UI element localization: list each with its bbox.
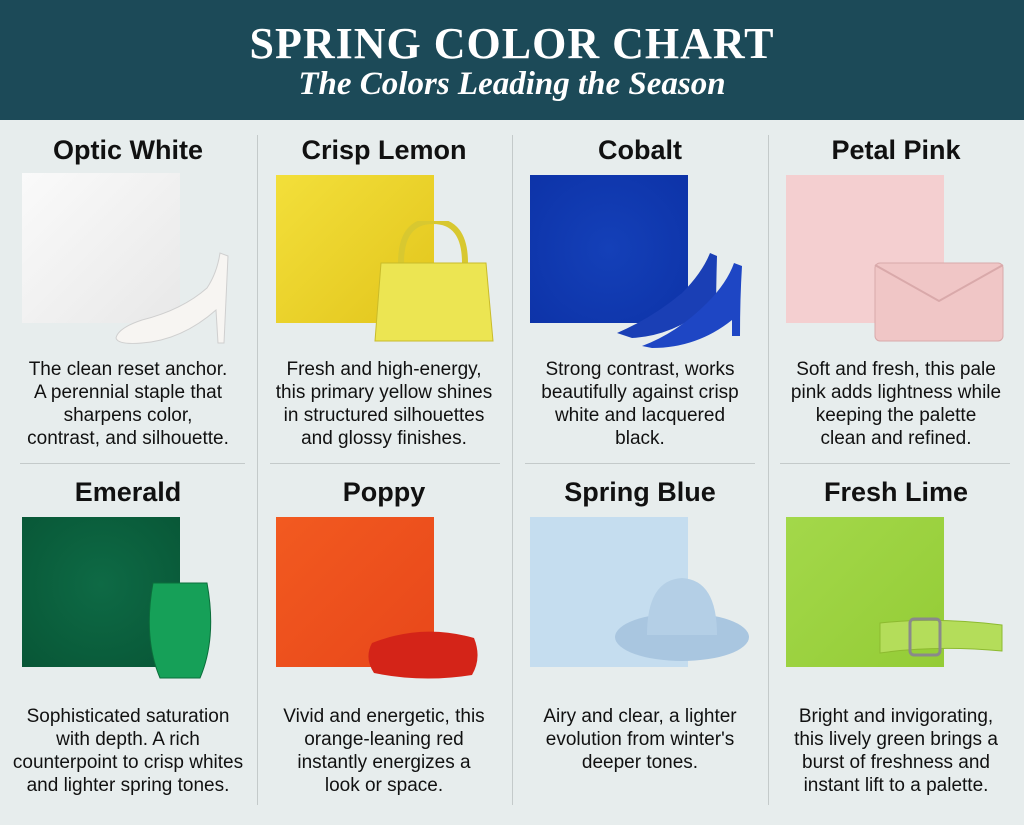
- panel: poppy: Poppy: [343, 477, 425, 507]
- panel: crisp lemon: this primary yellow shines: [276, 382, 492, 403]
- panel: cobalt: beautifully against crisp: [541, 382, 739, 403]
- panel: crisp lemon: Crisp Lemon: [301, 135, 467, 165]
- panel: petal pink: keeping the palette: [816, 405, 976, 426]
- icon: clutch: [874, 262, 1004, 342]
- panel: fresh lime: Bright and invigorating,: [799, 706, 993, 727]
- panel: optic white: A perennial staple that: [34, 382, 222, 403]
- panel: crisp lemon: Fresh and high-energy,: [286, 359, 482, 380]
- swatch pink: [786, 175, 944, 323]
- panel: crisp lemon: in structured silhouettes: [284, 405, 484, 426]
- panel: spring blue: Spring Blue: [564, 477, 716, 507]
- icon: handbag: [374, 221, 494, 342]
- header: [0, 0, 1024, 120]
- panel: crisp lemon: [276, 135, 494, 449]
- icon: hat: [615, 578, 749, 661]
- panel: poppy: Vivid and energetic, this: [283, 706, 485, 727]
- panel: poppy: orange-leaning red: [304, 729, 464, 750]
- panel: cobalt: white and lacquered: [555, 405, 725, 426]
- panel: spring blue: evolution from winter's: [546, 729, 734, 750]
- panel: spring blue: [530, 477, 749, 773]
- panel: optic white: Optic White: [53, 135, 203, 165]
- panel: petal pink: clean and refined.: [820, 428, 972, 449]
- swatch spring blue: [530, 517, 688, 667]
- panel: emerald: and lighter spring tones.: [27, 775, 229, 796]
- panel: cobalt: black.: [615, 428, 665, 449]
- swatch yellow: [276, 175, 434, 323]
- panel: emerald: [13, 477, 243, 796]
- icon: blue pumps: [617, 253, 742, 348]
- panel: poppy: look or space.: [325, 775, 443, 796]
- swatch emerald: [22, 517, 180, 667]
- panel: emerald: counterpoint to crisp whites: [13, 752, 243, 773]
- panel: spring blue: Airy and clear, a lighter: [543, 706, 737, 727]
- panel: optic white: sharpens color,: [64, 405, 192, 426]
- panel: poppy: instantly energizes a: [297, 752, 471, 773]
- swatch white: [22, 173, 180, 323]
- swatch lime: [786, 517, 944, 667]
- panel: crisp lemon: and glossy finishes.: [301, 428, 467, 449]
- panel: cobalt: Cobalt: [598, 135, 682, 165]
- swatch cobalt: [530, 175, 688, 323]
- panel: cobalt: Strong contrast, works: [545, 359, 735, 380]
- panel: petal pink: pink adds lightness while: [791, 382, 1001, 403]
- panel: optic white: The clean reset anchor.: [29, 359, 227, 380]
- panel: fresh lime: this lively green brings a: [794, 729, 998, 750]
- panel: optic white: contrast, and silhouette.: [27, 428, 229, 449]
- panel: spring blue: deeper tones.: [582, 752, 698, 773]
- panel: cobalt: [530, 135, 742, 449]
- panel: fresh lime: Fresh Lime: [824, 477, 968, 507]
- panel: petal pink: Petal Pink: [831, 135, 961, 165]
- panel: fresh lime: [786, 477, 1002, 796]
- icon: braided belt: [880, 618, 1002, 656]
- panel: petal pink: [786, 135, 1004, 449]
- title: SPRING COLOR CHART: [250, 19, 774, 68]
- icon: white pump: [116, 252, 228, 344]
- icon: red pillow: [368, 632, 478, 678]
- panel: fresh lime: instant lift to a palette.: [804, 775, 988, 796]
- subtitle: The Colors Leading the Season: [298, 66, 726, 102]
- swatch poppy: [276, 517, 434, 667]
- panel: emerald: Sophisticated saturation: [27, 706, 229, 727]
- icon: glass vase: [149, 582, 212, 678]
- panel: emerald: with depth. A rich: [56, 729, 200, 750]
- panel: petal pink: Soft and fresh, this pale: [796, 359, 996, 380]
- panel: fresh lime: burst of freshness and: [802, 752, 990, 773]
- panel: poppy: [276, 477, 485, 796]
- panel: emerald: Emerald: [75, 477, 181, 507]
- panel: optic white: [22, 135, 229, 449]
